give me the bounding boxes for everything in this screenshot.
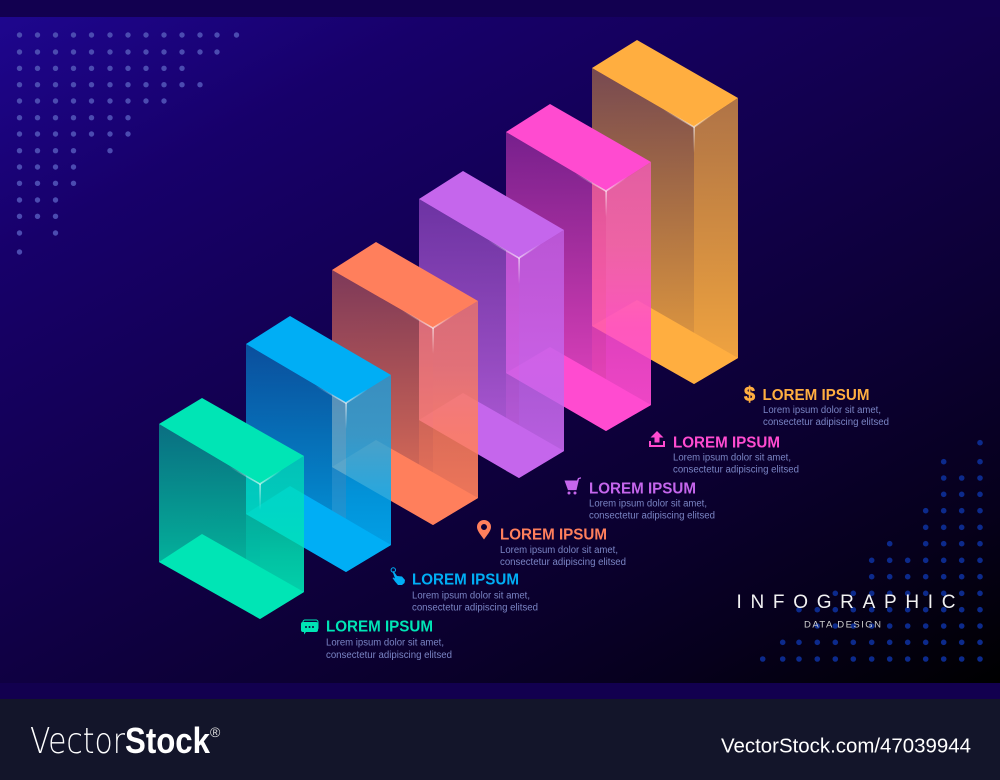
label: blue xyxy=(391,568,538,614)
heading: green: LOREM IPSUM xyxy=(326,619,433,636)
text: green description: Lorem ipsum dolor sit amet, xyxy=(326,638,444,649)
text: gold description: consectetur adipiscing elitsed xyxy=(763,417,889,428)
text: pink description: consectetur adipiscing elitsed xyxy=(673,464,799,475)
bottom band xyxy=(0,683,1000,699)
text: blue description: Lorem ipsum dolor sit amet, xyxy=(412,591,530,602)
icon: shopping cart xyxy=(564,477,581,494)
text: orange description xyxy=(500,545,626,568)
footer logo xyxy=(30,720,221,762)
text: gold description: Lorem ipsum dolor sit amet, xyxy=(763,405,881,416)
text: purple description: Lorem ipsum dolor sit amet, xyxy=(589,499,707,510)
icon: upload xyxy=(649,431,665,447)
isometric bar: purple xyxy=(419,171,564,478)
subtitle: data design: DATA DESIGN xyxy=(804,620,881,630)
text: pink description xyxy=(673,452,799,475)
isometric bar: blue xyxy=(246,316,391,572)
text: blue description: consectetur adipiscing elitsed xyxy=(412,602,538,614)
isometric bar: gold xyxy=(592,40,738,384)
text: purple description: consectetur adipiscing elitsed xyxy=(589,511,715,522)
text: pink description: Lorem ipsum dolor sit amet, xyxy=(673,452,791,463)
dot pattern: top left xyxy=(17,32,239,255)
isometric bar: pink xyxy=(506,104,651,431)
label: gold xyxy=(744,384,889,428)
text: blue description xyxy=(412,591,538,614)
heading: gold: LOREM IPSUM xyxy=(762,387,870,404)
text: green description xyxy=(326,638,452,661)
heading: orange: LOREM IPSUM xyxy=(500,526,607,543)
footer logo: ® xyxy=(210,724,221,740)
icon: map pin xyxy=(477,520,491,540)
heading: purple: LOREM IPSUM xyxy=(589,480,696,497)
footer image id: VectorStock.com/47039944 xyxy=(721,736,971,758)
text: gold description xyxy=(763,405,889,428)
heading: blue: LOREM IPSUM xyxy=(412,572,519,589)
label: orange xyxy=(477,520,626,568)
isometric bar: orange xyxy=(332,242,478,525)
footer logo: Stock xyxy=(125,720,211,761)
text: green description: consectetur adipiscing elitsed xyxy=(326,650,452,661)
title: infographic: INFOGRAPHIC xyxy=(736,592,956,613)
top band xyxy=(0,0,1000,17)
label: green xyxy=(301,619,452,661)
isometric bar: green xyxy=(159,398,304,619)
icon: pointing hand xyxy=(391,568,405,585)
footer logo: Vector xyxy=(30,721,125,762)
label: purple xyxy=(564,477,715,522)
icon: chat bubble xyxy=(301,620,318,634)
heading: pink: LOREM IPSUM xyxy=(673,434,780,451)
label: pink xyxy=(649,431,799,475)
text: orange description: consectetur adipiscing elitsed xyxy=(500,557,626,568)
dot pattern: bottom right xyxy=(760,440,983,662)
icon: dollar sign: $ xyxy=(744,384,755,406)
text: orange description: Lorem ipsum dolor sit amet, xyxy=(500,545,618,556)
text: purple description xyxy=(589,499,715,522)
footer bar xyxy=(0,699,1000,780)
